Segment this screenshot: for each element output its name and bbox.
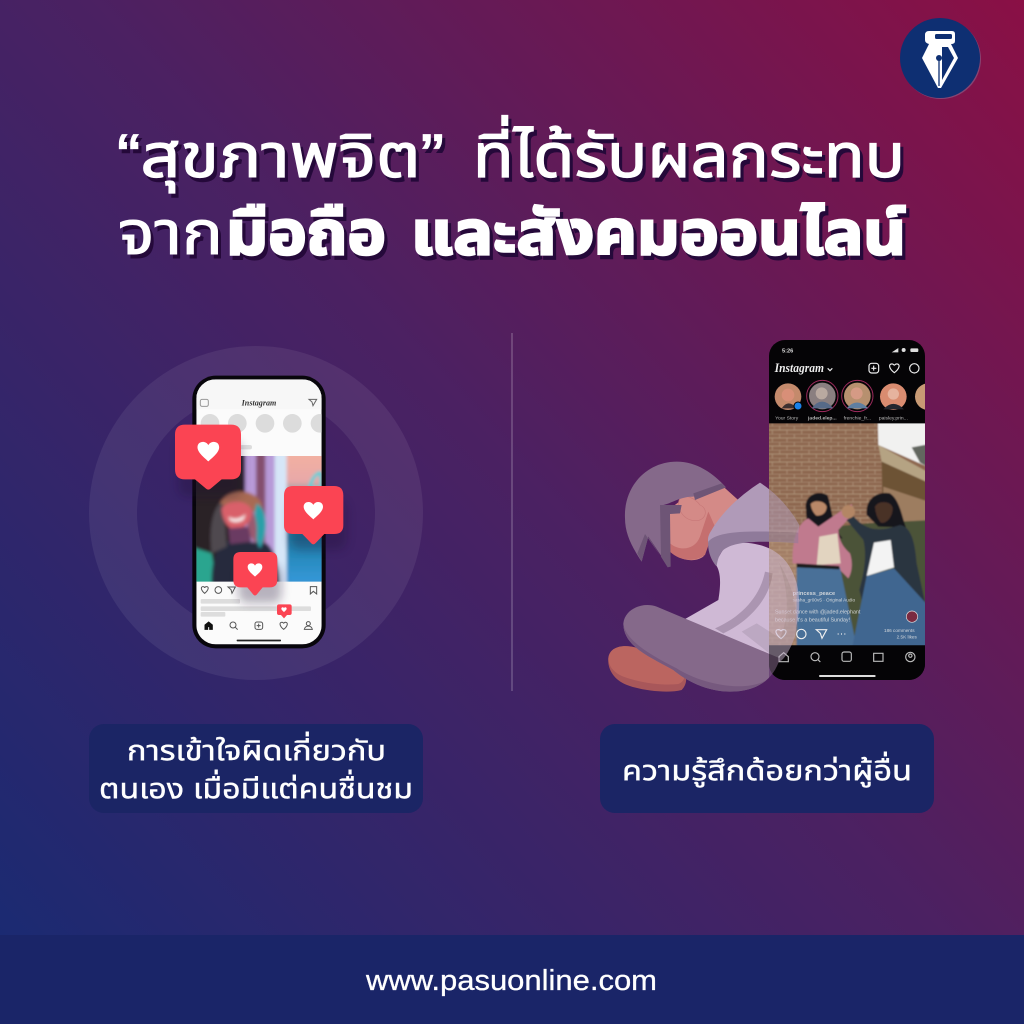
audio avatar <box>906 611 918 622</box>
title line 1 <box>117 115 905 193</box>
header icons <box>828 363 919 373</box>
title line 1: ที่ได้รับผลกระทบ <box>473 115 905 190</box>
left illustration: phone with likes <box>175 376 346 648</box>
like bubble lower <box>233 552 277 595</box>
title shadow line 2: มือถือ <box>229 203 389 271</box>
story placeholders <box>201 414 329 433</box>
caption placeholder bars <box>201 599 311 617</box>
hair <box>625 462 726 567</box>
like bubble right <box>284 486 343 544</box>
like bubble small <box>277 604 292 618</box>
footer bar <box>0 935 1024 1024</box>
raised hands <box>842 505 855 518</box>
caption box left <box>89 724 423 813</box>
post caption text: because it's a beautiful Sunday! <box>775 618 850 624</box>
logo: pen nib badge <box>900 18 981 99</box>
face <box>668 487 740 560</box>
right illustration: phone and seated person <box>608 340 925 692</box>
website url: www.pasuonline.com <box>365 965 657 997</box>
story names: jaded.elep... <box>807 415 837 421</box>
post caption text: Sunset dance with @jaded.elephant <box>775 609 861 615</box>
story avatars <box>775 380 942 412</box>
post caption text <box>775 591 918 640</box>
title <box>117 115 909 271</box>
caption box right <box>600 724 934 813</box>
post action icons <box>776 629 845 639</box>
photo of woman under neon lights <box>196 456 322 582</box>
instagram wordmark: Instagram <box>241 398 277 408</box>
post caption text: princess_peace <box>793 591 835 597</box>
photo of two women dancing <box>769 423 925 646</box>
home indicator <box>819 675 876 677</box>
title line 1: “สุขภาพจิต” <box>117 122 444 193</box>
post caption text: 186 comments <box>884 628 915 633</box>
story names: Your Story <box>775 415 799 421</box>
instagram wordmark: Instagram <box>774 361 824 375</box>
left concentric rings <box>89 346 423 680</box>
caption right text: ความรู้สึกด้อยกว่าผู้อื่น <box>622 751 912 788</box>
title line 2: มือถือ <box>226 199 386 267</box>
torso <box>683 543 799 660</box>
seated person with hood <box>608 462 799 692</box>
story names: frenchie_fr... <box>844 415 871 421</box>
post caption text: 2.5K likes <box>897 635 918 640</box>
title shadow line 1: “สุขภาพจิต” <box>120 126 447 197</box>
phone body <box>192 376 326 648</box>
home indicator <box>237 640 281 641</box>
bottom nav icons <box>779 652 915 662</box>
title line 2: จาก <box>118 199 223 267</box>
right woman <box>867 493 906 527</box>
camera icon <box>200 399 208 406</box>
legs <box>623 605 780 692</box>
phone screen <box>196 379 322 644</box>
action icons <box>201 587 317 594</box>
title line 2 <box>118 199 906 267</box>
title line 2: และสังคมออนไลน์ <box>411 199 906 267</box>
post header <box>240 445 252 449</box>
story names: paisley.prin... <box>879 415 908 421</box>
hood <box>708 483 799 543</box>
bottom nav icons <box>205 622 312 630</box>
shoe <box>608 646 686 692</box>
bottom nav bar <box>769 645 925 682</box>
title shadow line 1: ที่ได้รับผลกระทบ <box>476 119 908 194</box>
centre divider <box>512 333 513 691</box>
status bar: 5:26 <box>782 349 793 355</box>
title shadow line 2 <box>121 203 909 271</box>
hood ring <box>708 532 798 567</box>
like bubble large <box>175 425 241 490</box>
title shadow line 2: จาก <box>121 203 226 271</box>
story names <box>775 416 908 420</box>
post caption text: sasha_gr00v5 · Original Audio <box>793 598 855 603</box>
like bubble shadows <box>178 440 347 603</box>
caption left line 1: การเข้าใจผิดเกี่ยวกับ <box>127 731 386 766</box>
send icon <box>309 399 317 406</box>
status icons <box>892 348 918 352</box>
left woman <box>806 493 843 538</box>
dark-mode phone <box>769 340 925 680</box>
title shadow line 2: และสังคมออนไลน์ <box>414 203 909 271</box>
caption left line 2: ตนเอง เมื่อมีแต่คนชื่นชม <box>99 769 413 804</box>
title shadow line 1 <box>120 119 908 197</box>
